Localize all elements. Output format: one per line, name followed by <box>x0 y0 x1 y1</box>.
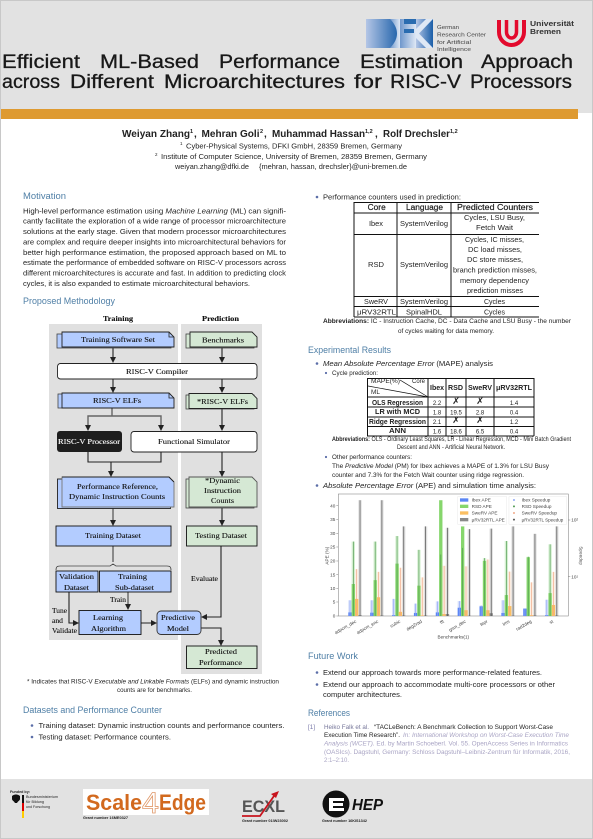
box: Benchmarks: Benchmarks <box>202 336 244 344</box>
bullet list: future work: Extend our approach towards more performance-related features. <box>323 668 542 677</box>
table: performance counters: SpinalHDL <box>406 308 442 316</box>
table note: abbreviations <box>323 319 571 335</box>
authors: , <box>194 129 197 140</box>
bar chart: APE and speedup: cubic <box>389 619 402 629</box>
logo: funding ministry: Funded by: <box>10 790 30 794</box>
table: MAPE results: Core <box>412 379 426 385</box>
table: MAPE results: Ibex <box>430 383 445 392</box>
authors: Weiyan Zhang <box>122 129 190 140</box>
heading: Motivation: Motivation <box>23 191 66 201</box>
bar chart: APE and speedup: lms <box>502 619 511 627</box>
box: Dynamic Instruction Counts <box>186 476 257 508</box>
footnote: * Indicates that RISC-V Executable and Linkable Formats (ELFs) and dynamic instruction <box>27 680 279 686</box>
bar chart: APE and speedup: 10 <box>330 586 336 591</box>
table: MAPE results: 0.4 <box>510 410 519 416</box>
bullet: APE analysis: Absolute Percentage Error (APE) and simulation time analysis: <box>322 481 536 490</box>
bar chart: APE and speedup: Speedup <box>579 546 584 565</box>
bar chart: APE and speedup: 30 <box>330 531 336 536</box>
title: RISC-V <box>390 71 461 93</box>
title: ML-Based <box>100 51 199 73</box>
table: performance counters: DC store misses, <box>467 255 523 264</box>
heading: References: References <box>308 708 350 718</box>
box: Performance Reference <box>58 477 174 508</box>
bullet: MAPE analysis: Mean Absolute Percentage Error (MAPE) analysis <box>323 359 493 368</box>
table: MAPE results: 6.5 <box>476 430 485 436</box>
logo: Scale4Edge: Edge <box>159 790 206 815</box>
box: Predictive Model: Model <box>167 624 189 633</box>
table: performance counters: SystemVerilog <box>400 219 448 228</box>
authors: Rolf Drechsler <box>383 129 450 140</box>
box: Validation Dataset <box>56 571 98 592</box>
logo: ECXL <box>242 791 288 823</box>
table: MAPE results: 1.2 <box>510 420 519 426</box>
table: performance counters: SystemVerilog <box>400 297 448 306</box>
table: MAPE results: 1.4 <box>510 401 519 407</box>
bullet: MAPE analysis: Cycle prediction: <box>332 371 378 377</box>
table: performance counters: Core <box>368 203 386 212</box>
bar chart: APE and speedup: gsm_dec <box>448 619 467 633</box>
box: Functional Simulator <box>131 432 257 452</box>
footnote: counts are for benchmarks. <box>117 688 192 694</box>
heading: Proposed Methodology: Proposed Methodology <box>23 296 115 306</box>
bullet list: future work: Extend our approach to accommodate multi-core processors or other <box>323 680 555 689</box>
bar chart: APE and speedup: 35 <box>330 517 336 522</box>
flowchart: proposed methodology: Prediction <box>202 314 240 323</box>
table: performance counters: Fetch Wait <box>476 223 514 232</box>
table: performance counters: DC load misses, <box>468 245 522 254</box>
box: Testing Dataset: Testing Dataset <box>195 531 248 540</box>
box: Performance Reference: Performance Reference, <box>77 482 158 491</box>
logo: Scale4Edge: Scale <box>86 790 142 815</box>
table: performance counters: Cycles <box>484 297 505 306</box>
table: MAPE results: 18.6 <box>450 430 462 436</box>
table: MAPE results: 1.6 <box>433 430 442 436</box>
box: Training Sub-dataset: Sub-dataset <box>115 583 155 592</box>
legend: SweRV Speedup <box>522 511 557 516</box>
box: Testing Dataset <box>186 526 257 546</box>
box: Benchmarks <box>186 332 257 348</box>
flowchart: proposed methodology <box>49 314 262 674</box>
reference entry: 2:1–2:10. <box>324 757 349 764</box>
reference entry: “TACLeBench: A Benchmark Collection to Support Worst-Case <box>374 724 553 731</box>
reference entry: [1] <box>308 724 315 731</box>
table: MAPE results: μRV32RTL <box>496 383 532 392</box>
logo: Scale4Edge <box>83 787 209 820</box>
title: for <box>354 71 383 93</box>
affiliations: Institute of Computer Science, University of Bremen, 28359 Bremen, Germany <box>161 152 427 161</box>
box: Training Software Set: Training Software Set <box>81 335 156 344</box>
text block: motivation: cycles, it is also expanded to estimate microarchitectural behaviors. <box>23 279 250 288</box>
authors: 1 <box>190 129 193 135</box>
reference entry <box>308 724 570 764</box>
box: Validation Dataset: Dataset <box>64 583 90 592</box>
box: RISC-V Compiler: RISC-V Compiler <box>126 367 189 376</box>
bars <box>348 500 558 616</box>
table: performance counters <box>354 202 539 317</box>
bar chart: APE and speedup: 10¹ <box>571 574 578 579</box>
table: performance counters: prediction misses <box>467 286 523 295</box>
box: Learning Algorithm <box>79 610 141 634</box>
table note: abbreviations: Abbreviations: IC - Instruction Cache, DC - Data Cache and LSU Busy - the number <box>323 319 571 325</box>
affiliations: {mehran, hassan, drechsler}@uni-bremen.de <box>259 162 407 171</box>
bullet list: future work: computer architectures. <box>323 690 402 699</box>
arrow labels: Evaluate <box>191 574 219 583</box>
table: performance counters: Cycles, IC misses, <box>465 235 524 244</box>
logo: DFKI: Research Center <box>437 32 486 38</box>
bullet: performance counters: Performance counters used in prediction: <box>323 193 461 202</box>
bar chart: APE and speedup: deg2rad <box>406 619 423 632</box>
box: Training Dataset: Training Dataset <box>85 531 142 540</box>
box: Validation Dataset: Validation <box>59 572 94 581</box>
box: RISC-V ELFs <box>58 393 174 408</box>
table: MAPE results: 2.2 <box>433 401 442 407</box>
footnote <box>27 680 279 694</box>
table note: ML abbreviations <box>332 437 571 451</box>
logo: Scale4Edge: Grant number 16ME0327 <box>83 816 128 820</box>
table: performance counters: Ibex <box>369 219 383 228</box>
bar chart: APE and speedup: rad2deg <box>515 619 533 632</box>
text block: motivation: better high performance estimation, the proposed approach based on ML to <box>23 248 286 257</box>
bar chart: APE and speedup: adpcm_dec <box>334 619 358 635</box>
text block: motivation: estimate the performance of embedded software on RISC-V processors across <box>23 258 286 267</box>
bar chart: APE and speedup <box>325 494 584 639</box>
text block: motivation: different microarchitectures is accurate and fast. In addition to predicting clock <box>23 268 286 278</box>
legend <box>458 497 567 524</box>
text block: other performance counters: The Predictive Model (PM) for Ibex achieves a MAPE of 1.3% for LSU Busy <box>332 464 549 470</box>
bar chart: APE and speedup: st <box>549 619 555 625</box>
bar chart: APE and speedup: adpcm_enc <box>356 619 380 635</box>
legend: RSD Speedup <box>522 504 552 509</box>
table: MAPE results <box>367 378 534 436</box>
box: Learning Algorithm: Learning <box>93 613 123 622</box>
authors: , <box>264 129 267 140</box>
arrow labels: Train <box>110 595 126 604</box>
bullet list: datasets <box>31 721 285 742</box>
box: Predicted Performance <box>186 646 257 668</box>
reference entry: In: International Workshop on Worst-Case Execution Time <box>403 732 569 739</box>
reference entry: Heiko Falk et al. <box>324 724 369 731</box>
heading: Experimental Results: Experimental Results <box>308 345 391 355</box>
arrow labels: Tune <box>52 606 68 615</box>
bullet list: datasets: Training dataset: Dynamic instruction counts and performance counters. <box>38 721 284 730</box>
bullet list: future work <box>316 668 555 699</box>
logo: funding ministry <box>10 790 58 818</box>
logo: DFKI: German <box>437 25 459 31</box>
heading: Future Work: Future Work <box>308 651 358 661</box>
heading: Datasets and Performance Counter: Datasets and Performance Counter <box>23 705 162 715</box>
title: Efficient <box>2 51 81 73</box>
arrows <box>69 347 222 643</box>
text block: other performance counters: counter and 7.3% for the Fetch Wait counter using ridge regression. <box>332 473 524 479</box>
bar chart: APE and speedup: 5 <box>333 600 336 605</box>
bar chart: APE and speedup: 10² <box>571 518 578 523</box>
text block: motivation <box>23 206 287 288</box>
box: Training Dataset <box>56 526 171 546</box>
box: Dynamic Instruction Counts: Counts <box>211 496 234 505</box>
authors: Muhammad Hassan <box>272 129 365 140</box>
logo: HEP <box>322 790 383 823</box>
box: benchmark RISC-V ELFs <box>186 394 257 409</box>
arrow labels <box>52 574 219 635</box>
title: Processors <box>470 71 572 93</box>
bullet: MAPE analysis <box>316 359 493 377</box>
legend: Ibex Speedup <box>522 498 551 503</box>
text block: motivation: High-level performance estimation using Machine Learning (ML) can signifi- <box>23 206 287 215</box>
table: performance counters: Cycles, LSU Busy, <box>464 213 525 222</box>
logo: funding ministry: und Forschung <box>26 805 50 809</box>
footer band <box>1 779 592 838</box>
affiliations: weiyan.zhang@dfki.de <box>174 162 249 171</box>
table note: ML abbreviations: Abbreviations: OLS - Ordinary Least Squares, LR - Linear Regression, MCD - Mini Batch Gradient <box>332 437 571 443</box>
table: MAPE results: RSD <box>448 383 464 392</box>
table: performance counters: RSD <box>368 260 385 269</box>
table: MAPE results: SweRV <box>468 383 492 392</box>
logo: University of Bremen <box>499 20 575 45</box>
table: MAPE results: OLS Regression <box>372 398 423 407</box>
table: MAPE results: MAPE(%) <box>371 379 400 385</box>
logo: ECXL: ECXL <box>242 797 285 816</box>
text block: motivation: cantly facilitate the exploration of a wide range of processor microarchitecture <box>23 217 286 226</box>
logo: DFKI: for Artificial <box>437 40 471 46</box>
table: MAPE results: ✗ <box>452 397 460 407</box>
logo: HEP: HEP <box>352 797 383 814</box>
text block: motivation: solutions at the early stage. Given that modern processor microarchitectures <box>23 227 286 236</box>
reference entry: Analysis (WCET). Ed. by Martin Schoeberl. Vol. 55. OpenAccess Series in Informatics <box>323 740 569 748</box>
box: Training Software Set <box>57 332 174 348</box>
table: MAPE results: 2.8 <box>476 410 485 416</box>
logo: University of Bremen: Universität <box>530 21 575 28</box>
affiliations <box>155 141 427 171</box>
table: performance counters: branch prediction misses, <box>453 266 537 274</box>
bar chart: APE and speedup: 40 <box>330 503 336 508</box>
table: performance counters: SweRV <box>364 297 388 306</box>
box: Predictive Model: Predictive <box>161 613 196 622</box>
authors <box>122 129 458 140</box>
logo: funding ministry: Bundesministerium <box>26 795 58 799</box>
logo: ECXL: Grant number 01IW23002 <box>242 819 288 823</box>
title: Performance <box>219 51 340 73</box>
affiliations: Cyber-Physical Systems, DFKI GmbH, 28359 Bremen, Germany <box>186 142 402 150</box>
table: MAPE results: LR with MCD <box>375 407 421 416</box>
table: MAPE results: 2.1 <box>433 420 442 426</box>
header band <box>1 1 592 119</box>
table note: abbreviations: of cycles waiting for data memory. <box>398 329 494 335</box>
title <box>2 51 573 93</box>
box: Learning Algorithm: Algorithm <box>91 624 126 633</box>
table note: ML abbreviations: Descent and ANN - Artificial Neural Network. <box>397 445 505 451</box>
table: MAPE results: ✗ <box>476 416 484 426</box>
box: RISC-V ELFs: RISC-V ELFs <box>93 396 141 405</box>
bar chart: APE and speedup: fft <box>439 619 445 625</box>
authors: 1,2 <box>365 129 373 135</box>
logo: funding ministry: für Bildung <box>26 800 44 804</box>
table: performance counters: SystemVerilog <box>400 260 448 269</box>
bar chart: APE and speedup: lepr <box>479 619 489 627</box>
box: RISC-V Processor <box>57 431 122 452</box>
table: performance counters: Cycles <box>484 308 505 316</box>
text block: other performance counters: Other performance counters: <box>332 455 412 461</box>
box: Dynamic Instruction Counts: *Dynamic <box>205 476 241 485</box>
reference entry: (OASIcs). Dagstuhl, Germany: Schloss Dagstuhl–Leibniz-Zentrum für Informatik, 2016, <box>324 749 570 756</box>
affiliations: 2 <box>155 152 158 157</box>
bar chart: APE and speedup: 25 <box>330 545 336 550</box>
logo: University of Bremen: Bremen <box>530 29 561 36</box>
table: performance counters: μRV32RTL <box>357 308 396 316</box>
text block: motivation: are complex and require deeper insights into microarchitectural behaviors for <box>23 238 287 246</box>
arrow labels: and <box>52 616 63 625</box>
text block: other performance counters <box>325 455 549 479</box>
bullet list: datasets: Testing dataset: Performance counters. <box>38 733 171 742</box>
box: Dynamic Instruction Counts: Instruction <box>204 486 241 495</box>
legend: SweRV APE <box>472 511 497 516</box>
bar chart: APE and speedup: 0 <box>333 614 336 619</box>
legend: Ibex APE <box>472 498 491 503</box>
box: Predicted Performance: Performance <box>199 658 243 667</box>
box: RISC-V Compiler <box>58 364 257 379</box>
title: Different <box>70 71 155 93</box>
authors: 1,2 <box>450 129 458 135</box>
table: MAPE results: 0.4 <box>510 430 519 436</box>
flowchart: proposed methodology: Training <box>103 314 133 323</box>
logo: DFKI <box>366 19 486 53</box>
logo: Scale4Edge: 4 <box>142 787 159 820</box>
title: Estimation <box>360 51 463 73</box>
logo: DFKI: Intelligence <box>437 47 471 53</box>
table: performance counters: Language <box>406 203 444 212</box>
arrow labels: Validate <box>52 626 78 635</box>
box: Predicted Performance: Predicted <box>205 647 237 656</box>
title: Approach <box>481 51 573 73</box>
logo: HEP: Grant number 16KIS1342 <box>322 819 367 823</box>
title: across <box>2 71 60 93</box>
affiliations: 1 <box>180 141 183 146</box>
box: Performance Reference: Dynamic Instruction Counts <box>69 492 165 501</box>
table: MAPE results: ✗ <box>452 416 460 426</box>
table: MAPE results: ✗ <box>476 397 484 407</box>
reference entry: Execution Time Research”. <box>324 732 400 739</box>
box: Predictive Model <box>157 611 201 634</box>
table: MAPE results: 19.5 <box>450 410 462 416</box>
bar chart: APE and speedup: APE (%) <box>325 546 330 565</box>
authors: 2 <box>260 129 263 135</box>
authors: Mehran Goli <box>202 129 260 140</box>
table: MAPE results: ML <box>371 390 381 396</box>
box: Functional Simulator: Functional Simulator <box>158 437 231 446</box>
bar chart: APE and speedup: Benchmarks(1) <box>438 634 470 639</box>
title: Microarchitectures <box>164 71 345 93</box>
box: benchmark RISC-V ELFs: *RISC-V ELFs <box>197 397 248 406</box>
table: performance counters: memory dependency <box>460 276 529 285</box>
legend: RSD APE <box>472 504 492 509</box>
legend: μRV32RTL APE <box>472 517 505 522</box>
table: MAPE results: Ridge Regression <box>369 417 426 426</box>
table: performance counters: Predicted Counters <box>457 203 533 212</box>
table: MAPE results: 1.8 <box>433 410 442 416</box>
bar chart: APE and speedup: 20 <box>330 559 336 564</box>
legend: μRV32RTL Speedup <box>522 517 564 522</box>
box: Training Sub-dataset <box>100 571 171 592</box>
box: RISC-V Processor: RISC-V Processor <box>58 437 121 446</box>
bar chart: APE and speedup: 15 <box>330 572 336 577</box>
table: MAPE results: ANN <box>389 426 406 435</box>
authors: , <box>375 129 378 140</box>
box: Training Sub-dataset: Training <box>118 572 147 581</box>
